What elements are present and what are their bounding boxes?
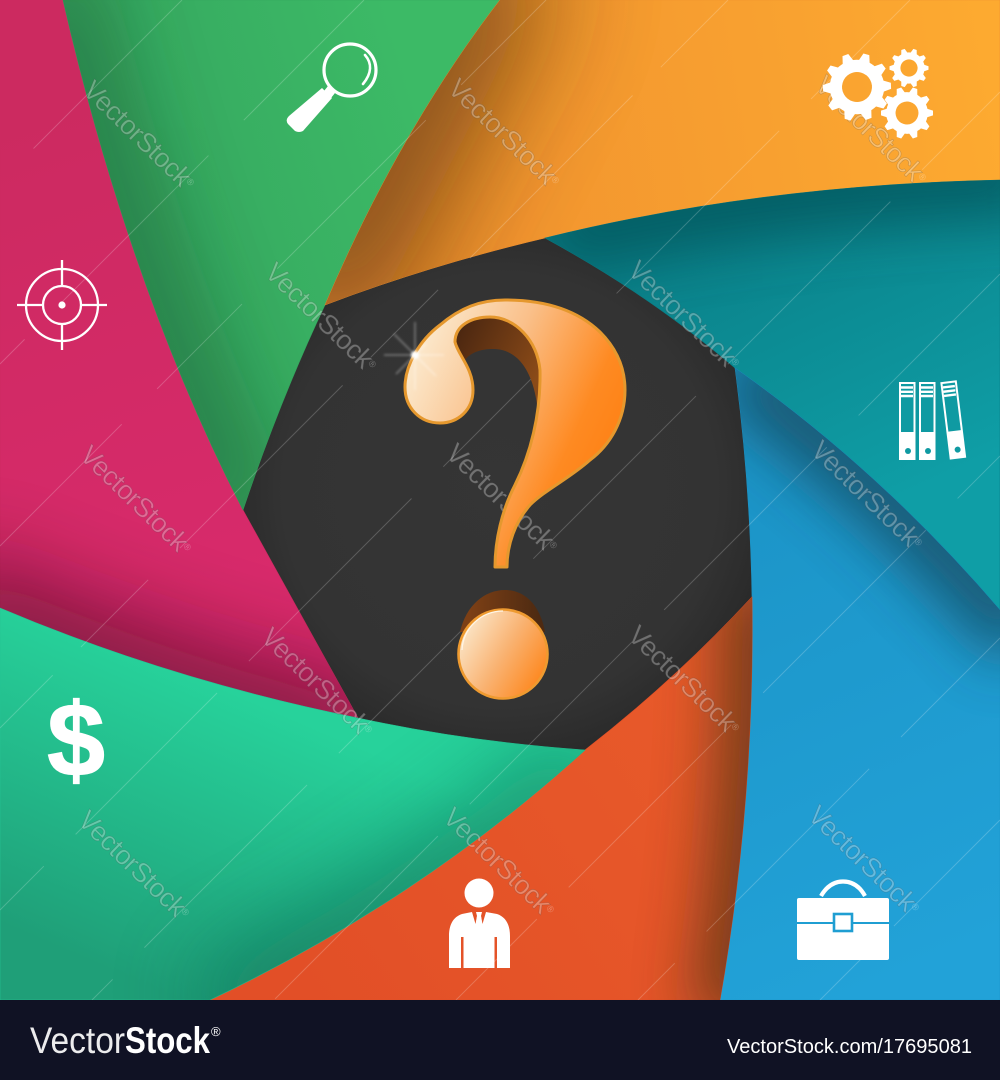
watermark: VectorStock diagonal grid: ® <box>184 176 196 188</box>
icon: briefcase <box>797 882 889 960</box>
watermark: VectorStock diagonal grid: ® <box>547 539 559 551</box>
icon: target crosshair <box>17 260 107 350</box>
watermark: VectorStock diagonal grid: ® <box>909 901 921 913</box>
watermark: VectorStock diagonal grid: VectorStock <box>442 73 562 190</box>
icon: binders <box>899 380 966 460</box>
watermark: VectorStock diagonal grid: VectorStock <box>437 802 557 919</box>
icon: glossy orange question mark <box>384 300 625 698</box>
icon: magnifying glass <box>287 44 376 132</box>
panel: teal petal <box>545 178 1000 610</box>
icon: binder two <box>919 382 936 460</box>
watermark: VectorStock diagonal grid: ® <box>181 541 193 553</box>
watermark: VectorStock diagonal grid: ® <box>362 723 374 735</box>
watermark: VectorStock diagonal grid: VectorStock <box>805 435 925 552</box>
footer logo: VectorStock: Stock <box>125 1020 210 1061</box>
watermark: VectorStock diagonal grid: VectorStock <box>77 75 197 192</box>
watermark: VectorStock diagonal grid: ® <box>916 171 928 183</box>
footer logo: VectorStock: ® <box>211 1024 221 1039</box>
watermark: VectorStock diagonal grid: ® <box>179 906 191 918</box>
panel: green petal <box>50 0 500 530</box>
icon: gears <box>815 43 940 146</box>
icon: businessman <box>449 878 510 968</box>
watermark: VectorStock diagonal grid: ® <box>729 356 741 368</box>
footer logo: VectorStock <box>30 1020 221 1061</box>
footer text: image id: VectorStock.com/17695081 <box>727 1036 972 1058</box>
footer logo: VectorStock: Vector <box>30 1020 125 1061</box>
watermark: VectorStock diagonal grid: ® <box>544 903 556 915</box>
panel: pink petal <box>0 0 380 735</box>
watermark: VectorStock diagonal grid: VectorStock <box>809 70 929 187</box>
watermark: VectorStock diagonal grid: ® <box>549 174 561 186</box>
watermark: VectorStock diagonal grid: VectorStock <box>802 800 922 917</box>
icon: dollar sign: $ <box>47 683 105 799</box>
watermark: VectorStock diagonal grid: VectorStock <box>259 257 379 374</box>
watermark: VectorStock diagonal grid: VectorStock <box>74 440 194 557</box>
panel: mint petal <box>0 608 595 1010</box>
watermark: VectorStock diagonal grid: VectorStock <box>622 620 742 737</box>
watermark: VectorStock diagonal grid: ® <box>912 536 924 548</box>
watermark: VectorStock diagonal grid: VectorStock <box>440 438 560 555</box>
watermark: VectorStock diagonal grid <box>72 70 934 927</box>
watermark: VectorStock diagonal grid: VectorStock <box>255 622 375 739</box>
icon: binder one <box>899 382 916 460</box>
panel: red-orange petal <box>210 580 761 1020</box>
watermark: VectorStock diagonal grid: VectorStock <box>622 255 742 372</box>
panel: blue petal <box>720 368 1000 1000</box>
watermark: VectorStock diagonal grid: ® <box>729 721 741 733</box>
icon: binder three, tilted <box>940 380 966 460</box>
panel: orange petal <box>324 0 1000 306</box>
footer bar <box>0 1000 1000 1080</box>
icon: sparkle on question mark <box>384 322 444 390</box>
watermark: VectorStock diagonal grid: ® <box>366 358 378 370</box>
watermark: VectorStock diagonal grid: VectorStock <box>72 805 192 922</box>
